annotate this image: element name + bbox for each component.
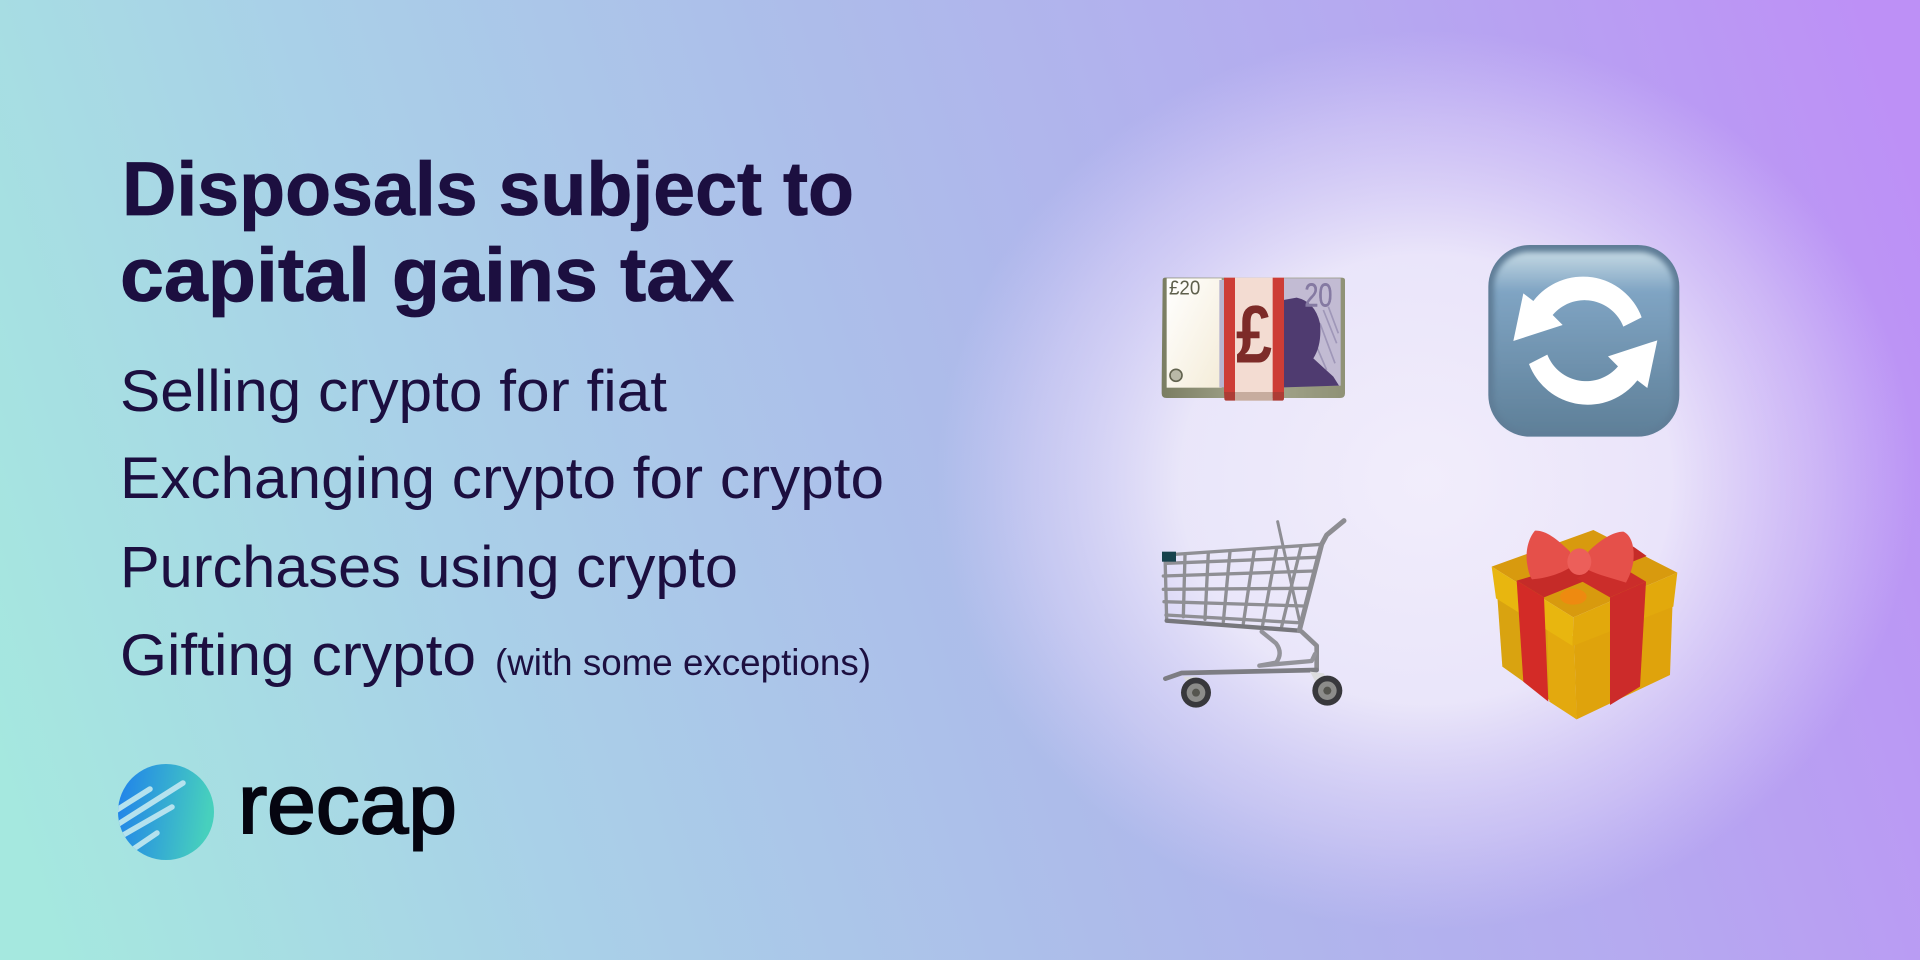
list item: exchanging: Exchanging crypto for crypto	[120, 446, 884, 511]
logo wordmark: recap	[238, 757, 457, 851]
cart left wheel	[1181, 678, 1211, 708]
title	[120, 147, 854, 318]
cart back flap	[1278, 522, 1299, 620]
cart right wheel	[1312, 676, 1342, 706]
list item: selling: Selling crypto for fiat	[120, 359, 667, 424]
list item: purchases: Purchases using crypto	[120, 535, 738, 600]
icon: pound banknotes: £20	[1169, 277, 1200, 300]
recap logo	[112, 757, 457, 860]
title: Disposals subject to	[122, 147, 854, 232]
logo mark	[112, 764, 214, 860]
list item: gifting: Gifting crypto	[120, 623, 476, 688]
icon: pound banknotes: £	[1236, 290, 1272, 381]
title: capital gains tax	[120, 233, 734, 318]
list of disposals	[120, 359, 884, 688]
icon: pound banknotes	[1162, 277, 1345, 401]
icon: gift box	[1492, 530, 1677, 719]
icon: pound banknotes: 20	[1304, 277, 1332, 314]
list item note: (with some exceptions)	[495, 642, 871, 683]
icon: shopping cart	[1162, 521, 1344, 708]
icon: sync arrows	[1488, 245, 1679, 437]
